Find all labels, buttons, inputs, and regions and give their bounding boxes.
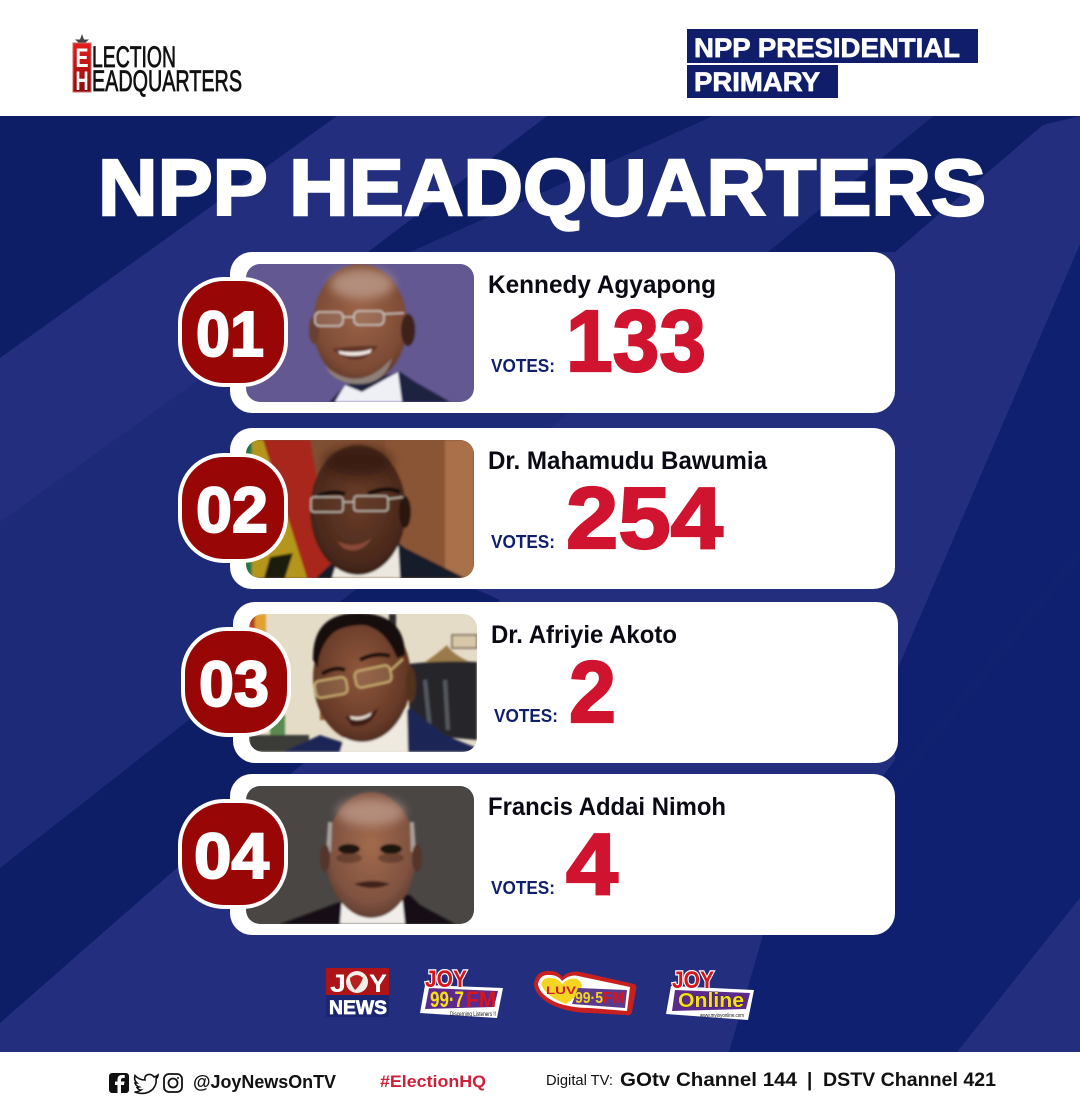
logo: Joy Online: www.myjoyonline.com <box>700 1013 744 1019</box>
icon: twitter <box>134 1074 158 1093</box>
logo: Luv 99.5 FM: FM <box>603 990 625 1007</box>
digital TV channels: GOtv Channel 144 <box>620 1070 797 1091</box>
votes label: VOTES: <box>491 532 555 552</box>
logo: Joy Online <box>666 967 754 1020</box>
card background <box>230 774 895 935</box>
votes value: 254 <box>566 470 723 567</box>
hashtag: #ElectionHQ <box>380 1072 486 1091</box>
logo: Joy Online: JOY <box>672 967 714 994</box>
digital TV channels: | <box>807 1070 812 1091</box>
card background <box>230 428 895 589</box>
logo: Joy News: NEWS <box>329 998 387 1019</box>
header band <box>0 0 1080 116</box>
logo: Joy News: J <box>330 970 346 998</box>
title: NPP HEADQUARTERS <box>98 143 986 232</box>
portrait: Dr. Mahamudu Bawumia <box>246 440 474 578</box>
logo: Luv 99.5 FM: LUV <box>546 985 577 997</box>
footer band <box>0 1052 1080 1108</box>
votes value: 4 <box>566 816 618 913</box>
icon: instagram <box>164 1074 182 1092</box>
portrait: Dr. Afriyie Akoto <box>249 613 477 752</box>
logo wordmark <box>92 41 242 98</box>
portrait: Kennedy Agyapong <box>246 264 474 402</box>
votes label: VOTES: <box>491 878 555 898</box>
rank badge 04: 04 <box>194 820 269 892</box>
logo: Luv 99.5 FM: 99·5 <box>575 990 603 1007</box>
rank badge 01: 01 <box>196 298 264 370</box>
candidate name: Kennedy Agyapong <box>488 271 716 299</box>
candidate name: Francis Addai Nimoh <box>488 793 726 821</box>
candidate name: Dr. Afriyie Akoto <box>491 621 677 649</box>
header tag: NPP Presidential Primary: PRIMARY <box>694 67 820 97</box>
panel: candidate 01 Kennedy Agyapong <box>180 252 895 413</box>
card background <box>230 252 895 413</box>
panel: candidate 02 Dr. Mahamudu Bawumia <box>180 428 895 589</box>
logo: Joy News <box>326 968 389 1019</box>
logo: Joy 99.7 FM: FM <box>466 987 496 1012</box>
rank badge 02 <box>180 455 286 561</box>
votes label: VOTES: <box>494 706 558 726</box>
rank badge 01 <box>180 279 286 385</box>
logo wordmark: EADQUARTERS <box>92 65 242 98</box>
votes label: VOTES: <box>491 356 555 376</box>
social handle: @JoyNewsOnTV <box>193 1072 336 1092</box>
logo EH emblem: H <box>76 66 88 96</box>
logo wordmark: LECTION <box>92 41 176 74</box>
rank badge 04 <box>180 801 286 907</box>
logo: Joy 99.7 FM <box>420 966 503 1018</box>
votes value: 133 <box>566 293 706 390</box>
logo EH emblem <box>73 43 91 96</box>
digital TV channels <box>546 1070 996 1091</box>
header tag: NPP Presidential Primary: NPP PRESIDENTIAL <box>694 33 960 63</box>
digital TV channels: DSTV Channel 421 <box>823 1070 996 1091</box>
rank badge 03 <box>183 629 289 735</box>
logo: Luv 99.5 FM <box>534 971 636 1015</box>
logo star <box>75 34 89 48</box>
card background <box>233 602 898 763</box>
logo: Joy 99.7 FM: JOY <box>425 966 467 993</box>
panel: candidate 03 Dr. Afriyie Akoto <box>183 602 898 763</box>
logo: Election Headquarters <box>73 34 242 98</box>
panel: candidate 04 Francis Addai Nimoh <box>180 774 895 935</box>
rank badge 03: 03 <box>199 648 269 720</box>
rank badge 02: 02 <box>196 474 268 546</box>
header tag: NPP Presidential Primary <box>687 29 978 98</box>
logo: Joy News: Y <box>369 970 387 998</box>
logo EH emblem: E <box>76 43 88 73</box>
logo: Joy Online: Online <box>678 990 744 1012</box>
digital TV channels: Digital TV: <box>546 1072 613 1089</box>
votes value: 2 <box>569 644 616 741</box>
portrait: Francis Addai Nimoh <box>246 786 474 924</box>
logo: Joy 99.7 FM: Discerning Listeners !! <box>450 1011 496 1018</box>
logo: Joy 99.7 FM: 99·7 <box>430 987 464 1012</box>
icon: facebook <box>109 1073 129 1093</box>
candidate name: Dr. Mahamudu Bawumia <box>488 447 768 475</box>
